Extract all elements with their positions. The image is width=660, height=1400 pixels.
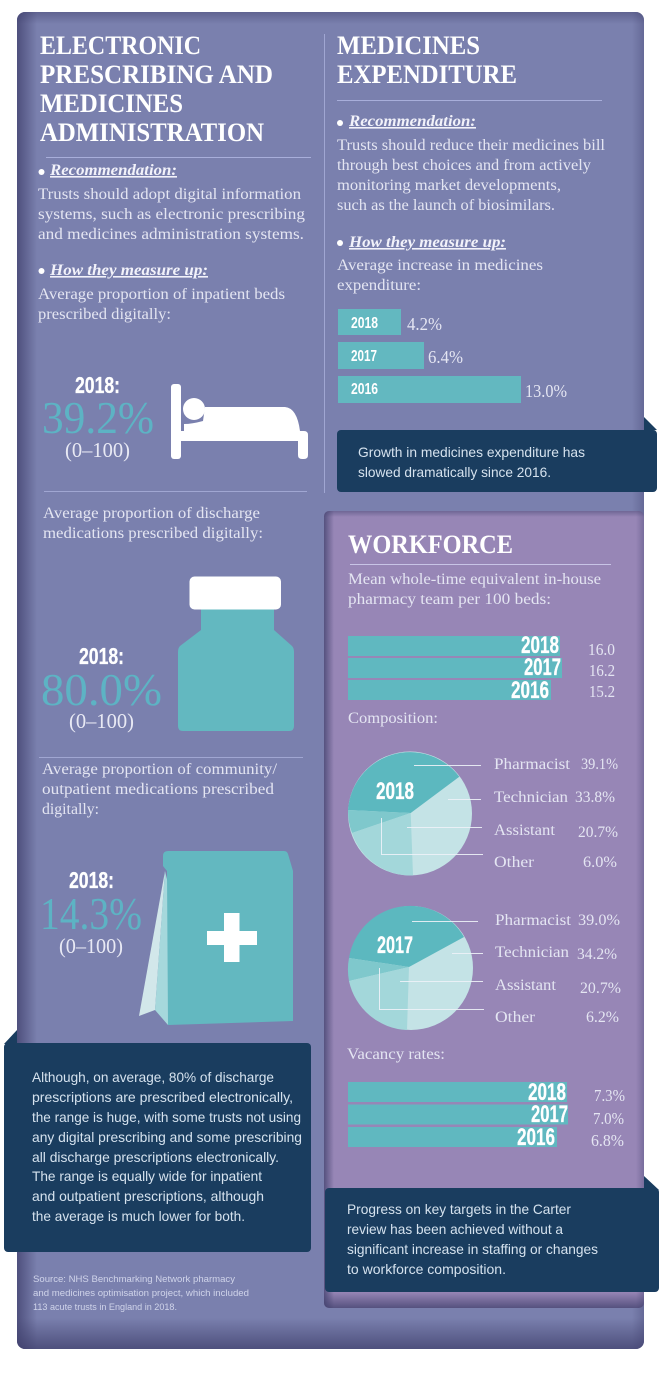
bar chart: medicines expenditure increase: 2016	[351, 381, 378, 398]
heading: electronic prescribing	[40, 31, 273, 147]
pie chart: 2017 composition: 2017	[377, 932, 413, 959]
callout: expenditure growth: slowed dramatically since 2016.	[358, 464, 551, 480]
bar chart: vacancy rates: 6.8%	[591, 1131, 624, 1150]
how they measure up: expenditure: How they measure up:	[348, 234, 506, 251]
callout: digital prescribing range: any digital prescribing and some prescribing	[32, 1129, 302, 1145]
callout: expenditure growth: Growth in medicines expenditure has	[358, 444, 585, 460]
stat: inpatient beds 39.2%	[42, 372, 154, 462]
text: team per 100 beds: Mean whole-time equivalent in-house	[348, 571, 601, 588]
recommendation text block	[38, 162, 305, 243]
callout: Carter review progress	[325, 1176, 659, 1292]
stat: inpatient beds 39.2%: 39.2%	[42, 392, 154, 443]
text: discharge medications: Average proportion of discharge	[43, 505, 260, 522]
how they measure up: expenditure: Average increase in medicines	[337, 257, 543, 274]
recommendation text block: Recommendation:	[348, 113, 476, 130]
how they measure up: inpatient beds	[38, 262, 285, 323]
callout: digital prescribing range: the range is huge, with some trusts not using	[32, 1109, 301, 1125]
recommendation text block: such as the launch of biosimilars.	[337, 197, 555, 214]
bar chart: team per 100 beds: 15.2	[589, 682, 615, 701]
legend: 2018 composition: 6.0%	[583, 854, 617, 871]
icon: medicine bottle	[178, 576, 294, 731]
callout: digital prescribing range: prescriptions are prescribed electronically,	[32, 1089, 293, 1105]
source note	[33, 1274, 249, 1313]
icon: bed	[171, 384, 308, 459]
callout: Carter review progress: to workforce composition.	[347, 1261, 506, 1277]
text: community and outpatient medications: digitally:	[42, 801, 99, 818]
legend: 2018 composition: 33.8%	[575, 789, 615, 806]
stat: community medications 14.3%: 14.3%	[40, 888, 142, 939]
pie chart: 2018 composition	[348, 752, 483, 876]
heading: electronic prescribing: PRESCRIBING AND	[40, 60, 273, 89]
text: community and outpatient medications: Average proportion of community/	[42, 761, 278, 778]
how they measure up: expenditure: expenditure:	[337, 277, 421, 294]
callout: digital prescribing range: Although, on average, 80% of discharge	[32, 1069, 274, 1085]
bar chart: vacancy rates: 2017	[531, 1101, 568, 1128]
legend: 2017 composition: 20.7%	[580, 980, 621, 997]
legend: 2018 composition: Other	[494, 854, 535, 871]
text: team per 100 beds	[348, 571, 601, 608]
recommendation text block: systems, such as electronic prescribing	[38, 206, 305, 223]
icon: medicine bag	[139, 851, 293, 1025]
recommendation text block: through best choices and from actively	[337, 157, 591, 174]
stat: community medications 14.3%	[40, 867, 142, 958]
panel: electronic prescribing	[38, 31, 311, 1025]
legend: 2017 composition: Assistant	[495, 977, 557, 994]
heading: medicines expenditure	[337, 31, 517, 89]
panel: medicines expenditure	[337, 31, 606, 403]
text: composition: Composition:	[348, 710, 438, 727]
stat: discharge medications 80.0%: 2018:	[79, 643, 124, 669]
legend: 2018 composition	[494, 756, 618, 871]
recommendation text block	[337, 113, 606, 214]
heading: medicines expenditure: EXPENDITURE	[337, 60, 517, 89]
recommendation text block: and medicines administration systems.	[38, 226, 304, 243]
bar chart: vacancy rates: 7.0%	[593, 1109, 624, 1128]
legend: 2017 composition: Technician	[495, 944, 569, 961]
how they measure up: expenditure	[337, 234, 543, 294]
legend: 2017 composition	[495, 912, 621, 1026]
text: discharge medications: medications prescribed digitally:	[43, 525, 263, 542]
text: discharge medications	[43, 505, 263, 542]
bar chart: team per 100 beds: 16.2	[589, 661, 615, 680]
recommendation text block: Trusts should adopt digital information	[38, 186, 301, 203]
bar chart: team per 100 beds: 2017	[524, 654, 561, 681]
legend: 2018 composition: Pharmacist	[494, 756, 571, 773]
bar chart: vacancy rates: 7.3%	[594, 1086, 625, 1105]
heading: electronic prescribing: MEDICINES	[40, 89, 183, 118]
bar chart: medicines expenditure increase: 4.2%	[407, 314, 442, 334]
heading: electronic prescribing: ADMINISTRATION	[40, 118, 264, 147]
legend: 2018 composition: Technician	[494, 789, 568, 806]
stat: inpatient beds 39.2%: (0–100)	[65, 438, 130, 462]
workforce panel background	[324, 511, 644, 1308]
source note: 113 acute trusts in England in 2018.	[33, 1302, 177, 1313]
pie chart: 2017 composition	[348, 906, 484, 1030]
bar chart: vacancy rates: 2016	[517, 1124, 555, 1151]
text: team per 100 beds: pharmacy team per 100 beds:	[348, 591, 551, 608]
stat: discharge medications 80.0%: 80.0%	[41, 664, 162, 715]
bar chart: medicines expenditure increase	[338, 309, 567, 403]
callout: Carter review progress: Progress on key targets in the Carter	[347, 1201, 571, 1217]
recommendation text block: Trusts should reduce their medicines bill	[337, 137, 606, 154]
stat: discharge medications 80.0%	[41, 643, 162, 733]
bar chart: medicines expenditure increase: 2018	[351, 315, 378, 332]
text: community and outpatient medications	[42, 761, 278, 818]
callout: digital prescribing range: The range is equally wide for inpatient	[32, 1168, 262, 1184]
stat: community medications 14.3%: (0–100)	[59, 934, 123, 958]
callout: Carter review progress: review has been achieved without a	[347, 1221, 563, 1237]
how they measure up: inpatient beds: prescribed digitally:	[38, 306, 171, 323]
text: vacancy rates: Vacancy rates:	[347, 1046, 445, 1063]
legend: 2017 composition: Pharmacist	[495, 912, 572, 929]
bar chart: vacancy rates	[348, 1079, 625, 1151]
bar chart: medicines expenditure increase: 6.4%	[428, 347, 463, 367]
bar chart: team per 100 beds: 16.0	[588, 640, 615, 659]
legend: 2018 composition: 20.7%	[578, 824, 618, 841]
stat: inpatient beds 39.2%: 2018:	[75, 372, 120, 398]
bar chart: team per 100 beds: 2018	[521, 632, 559, 659]
bar chart: team per 100 beds: 2016	[511, 677, 549, 704]
heading: electronic prescribing: ELECTRONIC	[40, 31, 201, 60]
source note: and medicines optimisation project, which included	[33, 1288, 249, 1299]
source note: Source: NHS Benchmarking Network pharmacy	[33, 1274, 235, 1285]
legend: 2017 composition: 6.2%	[586, 1009, 619, 1026]
bar chart: medicines expenditure increase: 2017	[351, 348, 377, 365]
callout: digital prescribing range: the average is much lower for both.	[32, 1208, 245, 1224]
pie chart: 2018 composition: 2018	[376, 778, 414, 805]
heading: medicines expenditure: MEDICINES	[337, 31, 480, 60]
panel: workforce	[324, 511, 644, 1308]
callout: digital prescribing range: and outpatient prescriptions, although	[32, 1188, 264, 1204]
bar chart: vacancy rates: 2018	[528, 1079, 566, 1106]
how they measure up: inpatient beds: How they measure up:	[49, 262, 208, 279]
text: community and outpatient medications: outpatient medications prescribed	[42, 781, 274, 798]
legend: 2018 composition: Assistant	[494, 822, 556, 839]
legend: 2017 composition: Other	[495, 1009, 536, 1026]
column divider	[324, 34, 326, 493]
legend: 2018 composition: 39.1%	[581, 756, 618, 773]
recommendation text block: monitoring market developments,	[337, 177, 561, 194]
callout: Carter review progress: significant increase in staffing or changes	[347, 1241, 598, 1257]
legend: 2017 composition: 34.2%	[577, 946, 617, 963]
how they measure up: inpatient beds: Average proportion of inpatient beds	[38, 286, 285, 303]
callout: expenditure growth	[337, 417, 657, 492]
stat: discharge medications 80.0%: (0–100)	[69, 709, 134, 733]
legend: 2017 composition: 39.0%	[578, 912, 620, 929]
callout: digital prescribing range	[4, 1030, 311, 1252]
bar chart: team per 100 beds	[348, 632, 615, 704]
heading: workforce: WORKFORCE	[348, 530, 513, 559]
stat: community medications 14.3%: 2018:	[69, 867, 114, 893]
callout: digital prescribing range: all discharge prescriptions electronically.	[32, 1149, 279, 1165]
bar chart: medicines expenditure increase: 13.0%	[525, 381, 567, 401]
recommendation text block: Recommendation:	[49, 162, 177, 179]
